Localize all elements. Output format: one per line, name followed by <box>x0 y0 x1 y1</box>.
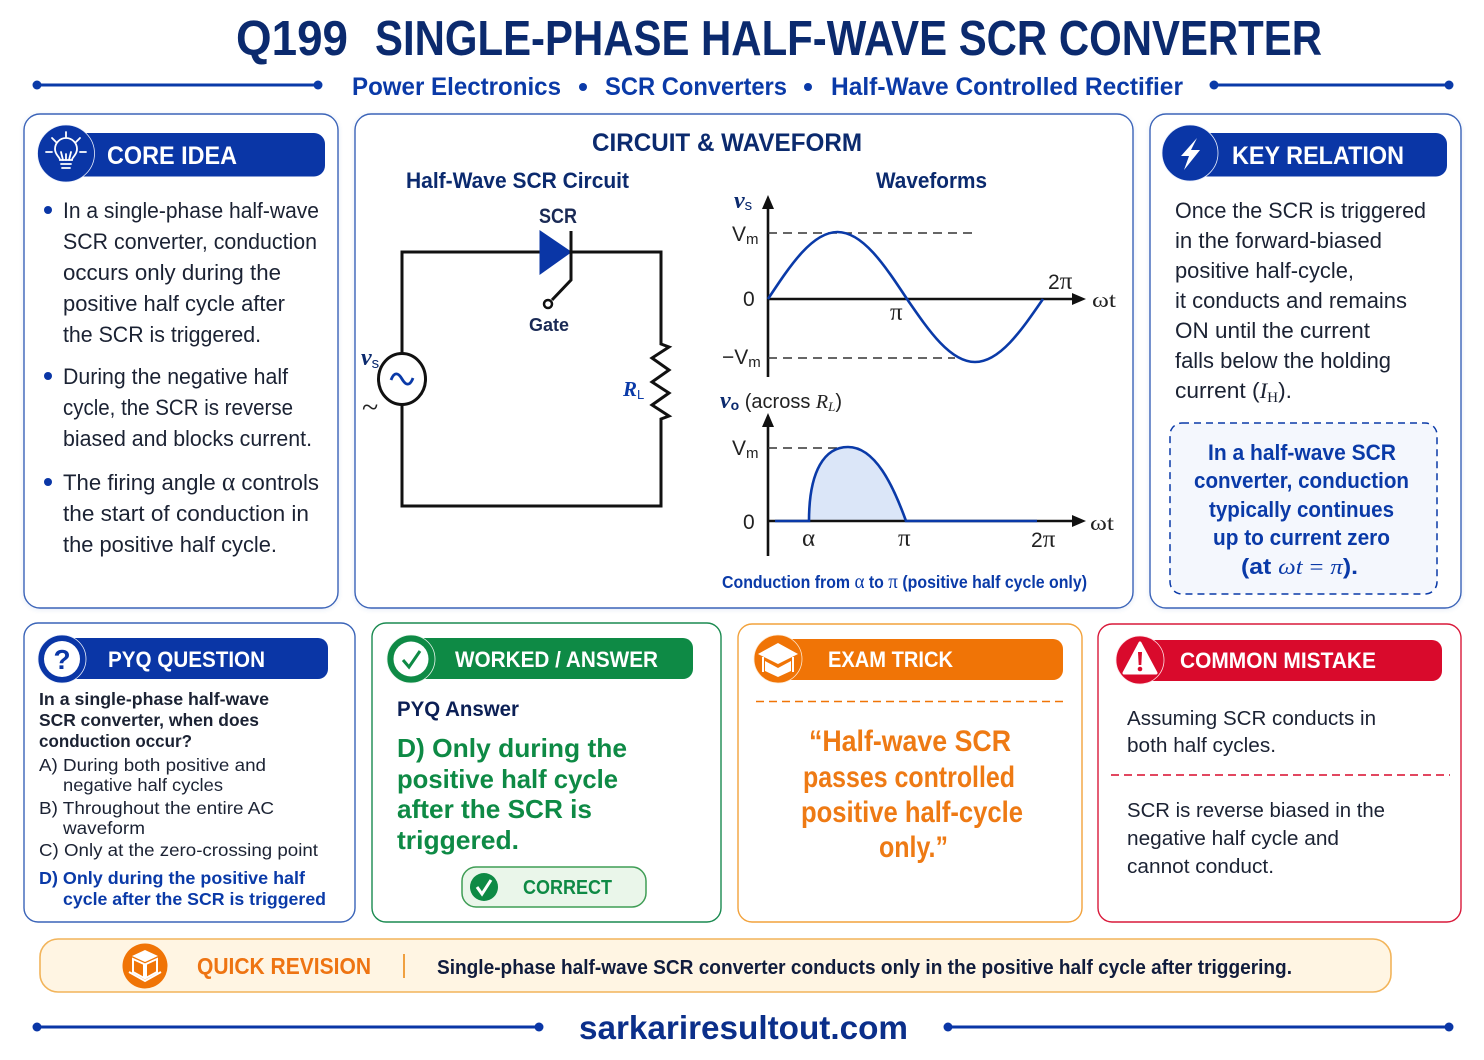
exam trick header: EXAM TRICK <box>828 647 953 672</box>
chart: output voltage waveform: R <box>815 391 828 413</box>
key relation text: H <box>1267 390 1278 406</box>
icon: question mark: ? <box>53 644 71 675</box>
worked header <box>387 635 693 683</box>
correct badge <box>462 867 646 907</box>
quick revision label: QUICK REVISION <box>197 953 371 979</box>
chart: output voltage waveform: o <box>731 397 739 413</box>
callout: current zero: typically continues <box>1209 497 1394 522</box>
chart: output voltage waveform: m <box>746 445 759 462</box>
chart: output voltage waveform: 2π <box>1031 526 1056 553</box>
answer options: A) During both positive and <box>39 755 266 775</box>
exam trick header <box>754 635 1063 683</box>
gate label: Gate <box>529 315 569 335</box>
answer options <box>39 755 326 909</box>
callout: current zero: converter, conduction <box>1194 468 1409 493</box>
correction text: negative half cycle and <box>1127 828 1339 850</box>
subtitle bar <box>32 73 1454 101</box>
key relation header: KEY RELATION <box>1232 142 1404 170</box>
exam trick divider <box>756 700 1064 702</box>
chart: source voltage waveform <box>722 188 1116 377</box>
chart: source voltage waveform: 2π <box>1048 268 1073 295</box>
core idea bullets: In a single-phase half-wave <box>63 198 319 223</box>
chart: source voltage waveform: −V <box>722 346 748 369</box>
load resistor label: L <box>637 387 644 402</box>
exam trick quote: only.” <box>879 831 948 864</box>
chart: source voltage waveform: 0 <box>743 288 755 311</box>
chart: source voltage waveform: ωt <box>1092 288 1116 312</box>
core idea bullets: positive half cycle after <box>63 291 285 316</box>
answer text <box>397 733 627 855</box>
footer <box>32 1009 1454 1046</box>
chart: source voltage waveform: v <box>734 188 745 214</box>
source label: s <box>372 355 379 372</box>
core idea bullets <box>44 198 319 557</box>
core idea bullets: occurs only during the <box>63 260 281 285</box>
circuit subheading: Half-Wave SCR Circuit <box>406 168 630 193</box>
answer heading: PYQ Answer <box>397 698 519 721</box>
core idea bullets: The firing angle α controls <box>63 467 319 496</box>
answer text: positive half cycle <box>397 764 618 794</box>
exam trick quote: “Half-wave SCR <box>809 725 1011 758</box>
chart: output voltage waveform: 0 <box>743 511 755 534</box>
icon: light bulb <box>46 132 86 168</box>
question text <box>39 689 269 751</box>
icon: lightning bolt <box>1181 138 1200 170</box>
title: Q199 <box>236 12 348 66</box>
exam trick quote: passes controlled <box>803 761 1015 794</box>
SCR label: SCR <box>539 205 577 228</box>
callout: current zero: In a half-wave SCR <box>1208 440 1396 465</box>
answer options: waveform <box>62 818 145 838</box>
key relation text: Once the SCR is triggered <box>1175 198 1426 223</box>
title: SINGLE-PHASE HALF-WAVE SCR CONVERTER <box>375 12 1322 66</box>
PYQ header <box>38 635 328 683</box>
key relation text: in the forward-biased <box>1175 228 1382 253</box>
conduction note: Conduction from α to π (positive half cycle only) <box>722 569 1087 593</box>
load resistor label: R <box>623 377 637 401</box>
panel: worked answer <box>372 623 721 922</box>
chart: output voltage waveform <box>720 388 1114 556</box>
chart: output voltage waveform: ωt <box>1090 511 1114 535</box>
panel: exam trick <box>738 624 1082 922</box>
core idea bullets: the SCR is triggered. <box>63 322 261 347</box>
icon: SCR symbol <box>540 231 571 308</box>
chart: source voltage waveform: π <box>890 299 903 326</box>
circuit heading: CIRCUIT & WAVEFORM <box>592 129 862 157</box>
key relation text: positive half-cycle, <box>1175 258 1354 283</box>
exam trick quote: positive half-cycle <box>801 796 1023 829</box>
chart: output voltage waveform: L <box>827 399 835 414</box>
circuit diagram <box>361 205 669 506</box>
source label: v <box>361 345 372 371</box>
icon: warning triangle <box>1124 643 1156 673</box>
chart: source voltage waveform: s <box>745 197 752 214</box>
correction text: cannot conduct. <box>1127 856 1274 878</box>
answer text: after the SCR is <box>397 794 592 824</box>
subtitle bar: Half-Wave Controlled Rectifier <box>831 73 1183 101</box>
chart: source voltage waveform: V <box>732 223 746 246</box>
core idea bullets: biased and blocks current. <box>63 426 312 451</box>
exam trick quote <box>801 725 1023 864</box>
answer options: cycle after the SCR is triggered <box>63 889 326 909</box>
icon: question mark <box>44 641 80 677</box>
panel: PYQ question <box>24 623 355 922</box>
correct badge: CORRECT <box>523 877 612 899</box>
icon: AC source <box>378 354 426 404</box>
chart: output voltage waveform: π <box>898 525 911 552</box>
panel: quick revision <box>40 939 1391 992</box>
chart: source voltage waveform: m <box>748 354 761 371</box>
key relation text: falls below the holding <box>1175 348 1391 373</box>
callout: current zero <box>1170 423 1437 594</box>
core idea header <box>38 125 325 182</box>
core idea bullets: the start of conduction in <box>63 501 309 526</box>
chart: output voltage waveform: α <box>802 525 815 552</box>
answer text: D) Only during the <box>397 733 627 763</box>
key relation text <box>1175 198 1426 406</box>
core idea bullets: the positive half cycle. <box>63 532 277 557</box>
icon: cube on book <box>122 944 168 988</box>
subtitle bar: Power Electronics <box>352 73 561 101</box>
icon: check mark <box>394 642 428 676</box>
mistake text: Assuming SCR conducts in <box>1127 708 1376 730</box>
question text: In a single-phase half-wave <box>39 689 269 709</box>
waveforms subheading: Waveforms <box>876 168 987 193</box>
mistake divider <box>1111 774 1450 776</box>
PYQ header: PYQ QUESTION <box>108 647 265 672</box>
worked header: WORKED / ANSWER <box>455 647 658 672</box>
chart: output voltage waveform: (across <box>739 391 816 413</box>
callout: current zero: up to current zero <box>1213 525 1390 550</box>
chart: output voltage waveform: ) <box>835 391 842 413</box>
core idea bullets: During the negative half <box>63 364 289 389</box>
core idea bullets: SCR converter, conduction <box>63 229 317 254</box>
answer options: C) Only at the zero-crossing point <box>39 840 318 860</box>
correction text <box>1127 800 1385 878</box>
panel: key relation <box>1150 114 1461 608</box>
quick revision text: Single-phase half-wave SCR converter conducts only in the positive half cycle after triggering. <box>437 956 1292 979</box>
key relation text: it conducts and remains <box>1175 288 1407 313</box>
chart: source voltage waveform: m <box>746 231 759 248</box>
answer options: negative half cycles <box>63 775 223 795</box>
icon: graduation cap <box>758 643 798 677</box>
correction text: SCR is reverse biased in the <box>1127 800 1385 822</box>
panel: core idea <box>24 114 338 608</box>
panel: common mistake <box>1098 624 1461 922</box>
mistake text: both half cycles. <box>1127 735 1276 757</box>
chart: output voltage waveform: v <box>720 388 731 414</box>
key relation text: ON until the current <box>1175 318 1371 343</box>
core idea header: CORE IDEA <box>107 142 237 170</box>
key relation text: ). <box>1278 378 1292 403</box>
question text: conduction occur? <box>39 731 192 751</box>
chart: output voltage waveform: V <box>732 437 746 460</box>
answer text: triggered. <box>397 825 519 855</box>
panel: circuit and waveform <box>355 114 1133 608</box>
core idea bullets: cycle, the SCR is reverse <box>63 395 293 420</box>
answer options: D) Only during the positive half <box>39 868 305 888</box>
answer options: B) Throughout the entire AC <box>39 798 274 818</box>
key relation text: current (I <box>1175 378 1267 403</box>
question text: SCR converter, when does <box>39 710 259 730</box>
mistake text <box>1127 708 1376 757</box>
mistake header: COMMON MISTAKE <box>1180 648 1376 673</box>
subtitle bar: SCR Converters <box>605 73 787 101</box>
key relation header <box>1162 125 1447 181</box>
tilde mark: ~ <box>362 391 378 424</box>
footer: sarkariresultout.com <box>579 1009 908 1046</box>
mistake header <box>1116 636 1442 684</box>
callout: current zero: (at ωt = π). <box>1241 554 1358 579</box>
